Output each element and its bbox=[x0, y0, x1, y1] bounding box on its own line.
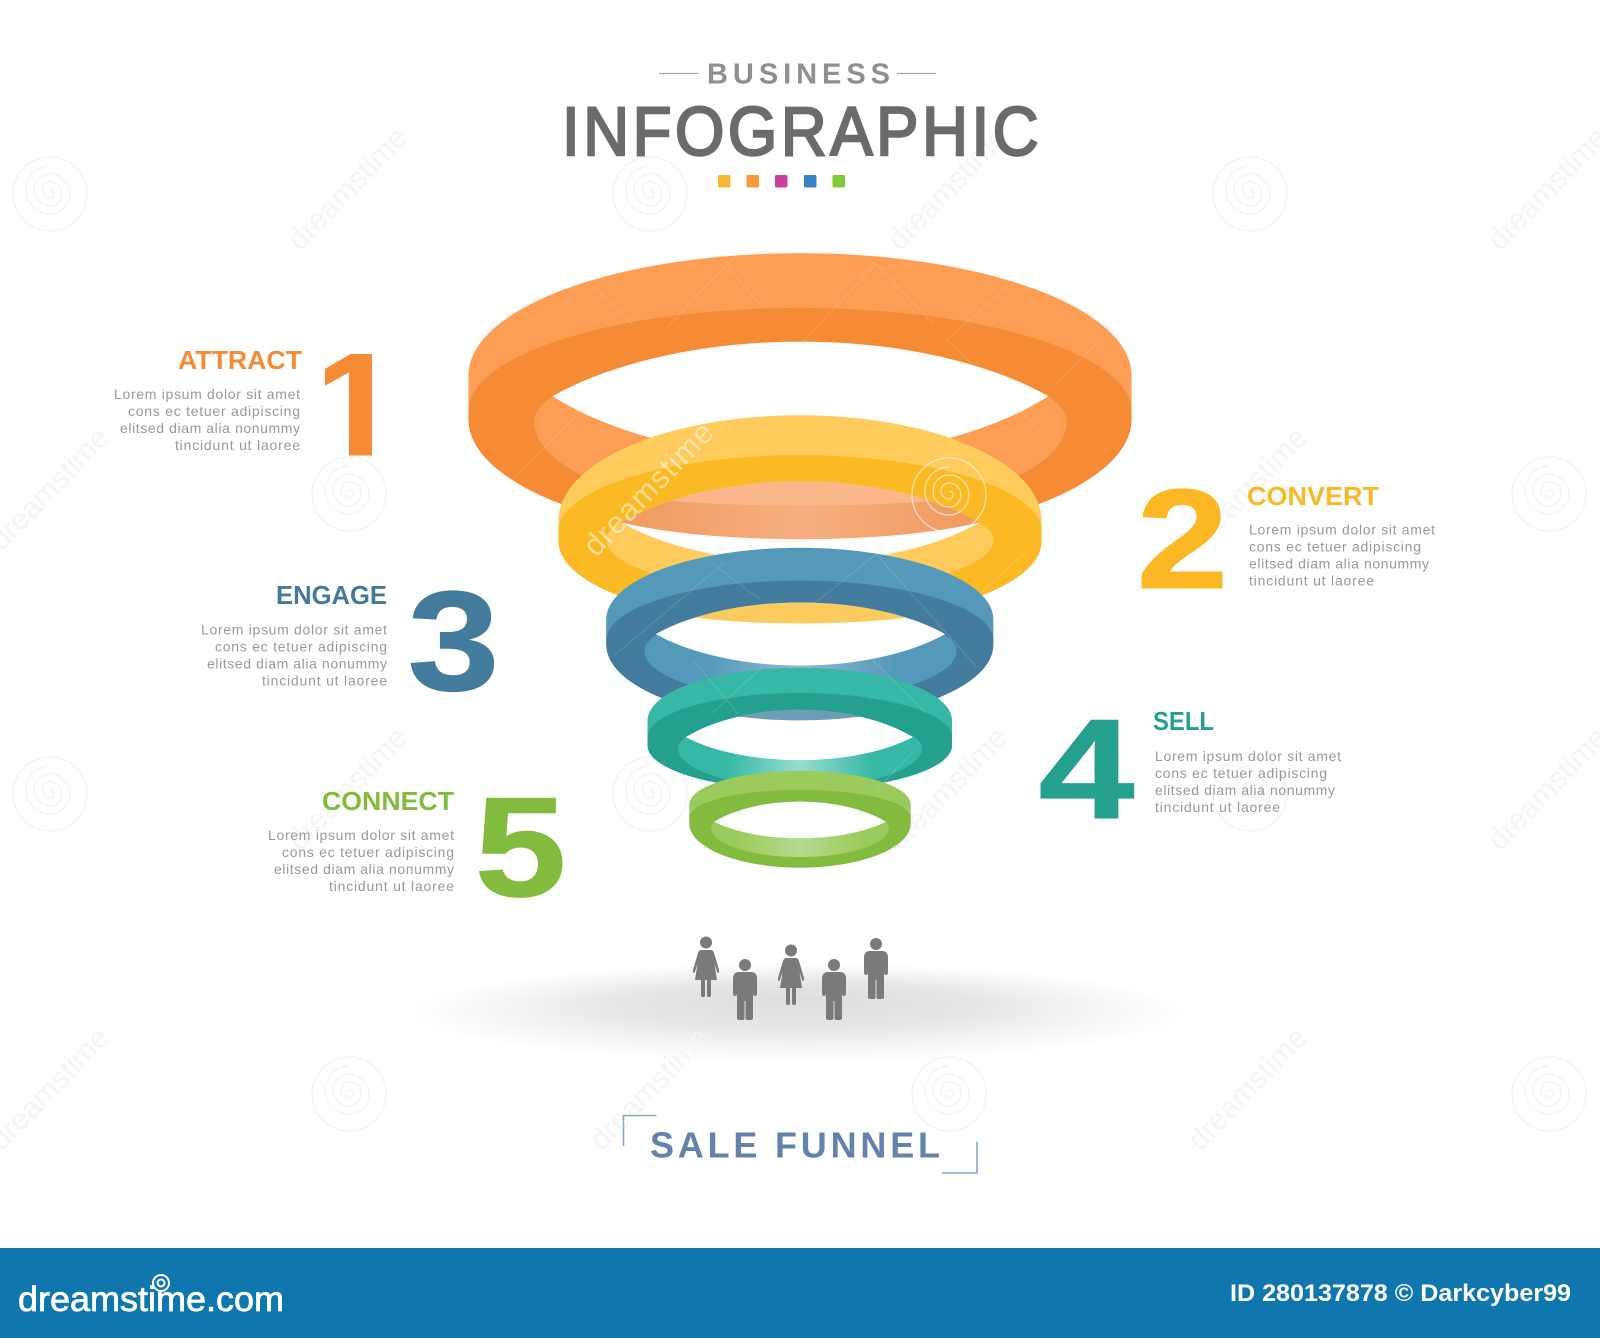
ring 5 green bbox=[689, 771, 911, 868]
description: elitsed diam alia nonummy bbox=[120, 420, 300, 436]
description: tincidunt ut laoree bbox=[262, 672, 387, 688]
step 3: engage bbox=[201, 562, 500, 721]
number 2: 2 bbox=[1136, 460, 1228, 619]
step 1: attract bbox=[115, 350, 372, 456]
title block bbox=[562, 58, 1039, 188]
description: cons ec tetuer adipiscing bbox=[215, 638, 387, 654]
description: Lorem ipsum dolor sit amet bbox=[114, 386, 300, 402]
description: tincidunt ut laoree bbox=[1249, 572, 1374, 588]
caption brackets bbox=[624, 1116, 977, 1173]
heading engage: ENGAGE bbox=[276, 580, 387, 610]
description bbox=[1249, 522, 1435, 588]
footer spiral bbox=[153, 1275, 169, 1291]
description: tincidunt ut laoree bbox=[1155, 799, 1280, 815]
description bbox=[1155, 748, 1341, 815]
watermark pattern: dreamstime bbox=[1181, 1021, 1314, 1157]
people icons bbox=[693, 936, 888, 1020]
description: cons ec tetuer adipiscing bbox=[1249, 538, 1421, 554]
description: Lorem ipsum dolor sit amet bbox=[201, 622, 387, 638]
description: cons ec tetuer adipiscing bbox=[1155, 765, 1327, 781]
funnel of five rings bbox=[468, 253, 1132, 868]
funnel caption bbox=[624, 1116, 977, 1173]
heading sell: SELL bbox=[1153, 706, 1214, 736]
number 1: 1 bbox=[311, 323, 403, 486]
description: elitsed diam alia nonummy bbox=[207, 656, 387, 672]
description bbox=[114, 386, 300, 453]
description: cons ec tetuer adipiscing bbox=[282, 844, 454, 860]
description: Lorem ipsum dolor sit amet bbox=[1249, 522, 1435, 538]
caption text: SALE FUNNEL bbox=[650, 1124, 940, 1166]
ring 3 blue bbox=[606, 548, 993, 721]
subtitle: business: BUSINESS bbox=[707, 58, 890, 90]
heading connect: CONNECT bbox=[322, 786, 454, 816]
description bbox=[201, 622, 387, 688]
number 3: 3 bbox=[408, 562, 500, 721]
watermark pattern: dreamstime bbox=[281, 121, 414, 257]
description: elitsed diam alia nonummy bbox=[1155, 782, 1335, 798]
watermark on yellow ring: dreamstime bbox=[576, 415, 721, 563]
description: cons ec tetuer adipiscing bbox=[128, 403, 300, 419]
step 5: connect bbox=[268, 768, 566, 927]
number 5: 5 bbox=[474, 768, 566, 927]
step 2: convert bbox=[1136, 460, 1435, 619]
description: elitsed diam alia nonummy bbox=[274, 861, 454, 877]
footer logo text: dreamstime.com bbox=[18, 1280, 284, 1319]
description: elitsed diam alia nonummy bbox=[1249, 556, 1429, 572]
ring 2 yellow bbox=[558, 415, 1042, 624]
colour squares bbox=[718, 175, 845, 188]
watermark on yellow ring bbox=[576, 415, 986, 563]
ground shadow bbox=[408, 963, 1188, 1063]
description: tincidunt ut laoree bbox=[329, 878, 454, 894]
description: tincidunt ut laoree bbox=[175, 437, 300, 453]
description bbox=[268, 827, 454, 894]
ring 4 teal bbox=[648, 668, 952, 790]
main title: infographic: INFOGRAPHIC bbox=[562, 94, 1039, 171]
watermark pattern: dreamstime bbox=[881, 121, 1014, 257]
description: Lorem ipsum dolor sit amet bbox=[1155, 748, 1341, 764]
watermark pattern bbox=[0, 121, 1600, 1157]
number 4: 4 bbox=[1038, 690, 1135, 849]
footer credit: ID 280137878 © Darkcyber99 bbox=[1230, 1280, 1571, 1307]
watermark pattern: dreamstime bbox=[583, 1021, 716, 1157]
step 4: sell bbox=[1038, 690, 1341, 849]
description: Lorem ipsum dolor sit amet bbox=[268, 827, 454, 843]
heading convert: CONVERT bbox=[1247, 481, 1379, 511]
heading attract: ATTRACT bbox=[178, 345, 302, 375]
watermark pattern: dreamstime bbox=[881, 721, 1014, 857]
watermark pattern: dreamstime bbox=[281, 721, 414, 857]
ring 1 orange bbox=[468, 253, 1132, 541]
footer bar bbox=[0, 1248, 1600, 1338]
watermark pattern: dreamstime bbox=[1181, 421, 1314, 557]
